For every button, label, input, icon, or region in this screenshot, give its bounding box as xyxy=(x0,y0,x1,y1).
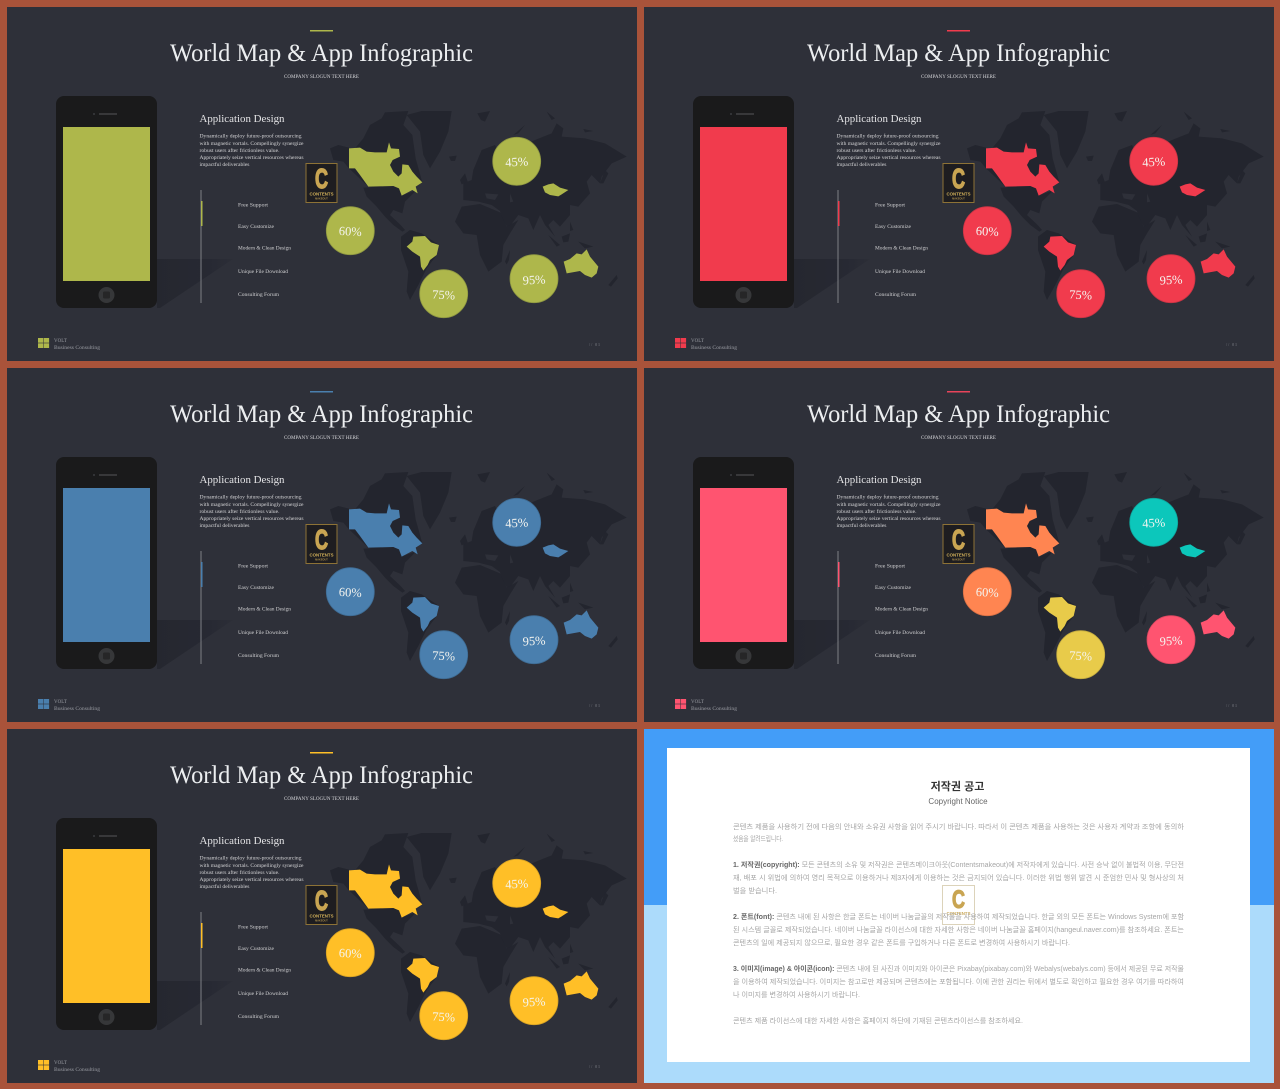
circle 75% xyxy=(1057,270,1105,318)
highlighted countries xyxy=(986,142,1235,278)
circle 45% xyxy=(1130,137,1178,185)
description: impactful deliverables xyxy=(200,522,250,529)
badge on notice: C xyxy=(952,886,965,914)
phone shadow xyxy=(157,981,233,1030)
circle 45% xyxy=(493,137,541,185)
phone xyxy=(693,96,794,308)
feature list: Unique File Download xyxy=(238,631,289,636)
world map xyxy=(330,833,627,1022)
badge: C xyxy=(952,524,965,555)
description: impactful deliverables xyxy=(836,161,886,168)
badge xyxy=(306,885,337,924)
circle 75% xyxy=(420,992,468,1040)
phone shadow xyxy=(157,620,233,669)
badge on notice: CONTENTS xyxy=(946,911,970,916)
notice subtitle: Copyright Notice xyxy=(928,797,988,806)
heading: Application Design xyxy=(200,113,285,125)
highlighted countries xyxy=(986,503,1235,639)
title: World Map & App Infographic xyxy=(807,401,1110,428)
badge on notice xyxy=(942,886,974,924)
circle 45% xyxy=(493,498,541,546)
circle 60% xyxy=(326,568,374,616)
description xyxy=(200,855,304,890)
badge: C xyxy=(952,163,965,194)
page number: // 01 xyxy=(589,342,600,347)
description: impactful deliverables xyxy=(836,522,886,529)
feature list: Easy Customize xyxy=(875,225,912,230)
feature list xyxy=(238,926,292,1020)
phone xyxy=(693,457,794,669)
footer text: Business Consulting xyxy=(54,1068,101,1073)
circle 60% xyxy=(963,568,1011,616)
feature list: Consulting Forum xyxy=(238,293,279,298)
footer text xyxy=(54,339,101,351)
slogan: COMPANY SLOGUN TEXT HERE xyxy=(284,797,359,802)
accent line xyxy=(947,30,970,32)
title: World Map & App Infographic xyxy=(170,762,473,789)
badge: CONTENTS xyxy=(310,914,334,918)
panel: multicolor variant xyxy=(644,368,1274,722)
feature list: Free Support xyxy=(238,564,269,570)
feature list: Free Support xyxy=(238,204,269,208)
slogan: COMPANY SLOGUN TEXT HERE xyxy=(921,75,996,80)
phone shadow xyxy=(794,259,870,308)
description: Appropriately seize vertical resources whereas xyxy=(200,877,304,883)
heading: Application Design xyxy=(836,474,922,486)
circle 75% xyxy=(1057,631,1105,679)
title: World Map & App Infographic xyxy=(170,40,473,67)
slogan: COMPANY SLOGUN TEXT HERE xyxy=(284,75,359,80)
footer text: Business Consulting xyxy=(691,707,738,712)
circle 95% xyxy=(510,255,558,303)
description: robust users after frictionless value. xyxy=(200,869,280,876)
feature list: Modern & Clean Design xyxy=(238,968,292,974)
circle 75% xyxy=(420,270,468,318)
highlighted countries xyxy=(349,864,598,1000)
footer logo xyxy=(38,699,49,709)
feature list: Easy Customize xyxy=(238,947,275,952)
circle 75%: 75% xyxy=(432,287,455,303)
description: with magnetic vortals. Compellingly synergize xyxy=(200,502,304,508)
progress line xyxy=(200,190,202,303)
section 3 image and icon: 을 이용하여 제작되었습니다. 이미지는 참고로만 제공되며 콘텐츠에는 포함됩니다. 이에 관한 권리는 뒤에서 별도로 확인하고 필요한 경우 여기를 따라하여 xyxy=(733,977,1184,986)
description: Appropriately seize vertical resources whereas xyxy=(836,516,940,522)
description: Appropriately seize vertical resources whereas xyxy=(200,155,304,161)
title: World Map & App Infographic xyxy=(170,401,473,428)
footer text xyxy=(54,1061,101,1073)
title: World Map & App Infographic xyxy=(807,40,1110,67)
description: Appropriately seize vertical resources whereas xyxy=(200,516,304,522)
description: robust users after frictionless value. xyxy=(836,147,916,154)
description: with magnetic vortals. Compellingly synergize xyxy=(200,141,304,147)
badge: CONTENTS xyxy=(310,192,334,196)
circle 60%: 60% xyxy=(338,224,362,239)
phone xyxy=(56,457,157,669)
description: Dynamically deploy future-proof outsourcing xyxy=(200,494,302,501)
footer text xyxy=(691,700,738,712)
accent line xyxy=(310,30,333,32)
footer logo xyxy=(675,338,686,348)
circle 45% xyxy=(1130,498,1178,546)
circle 75%: 75% xyxy=(432,648,455,664)
circle 60%: 60% xyxy=(338,585,362,600)
description: Dynamically deploy future-proof outsourcing xyxy=(200,855,302,862)
page number: // 01 xyxy=(1226,703,1237,708)
circle 45% xyxy=(493,859,541,907)
feature list: Easy Customize xyxy=(238,586,275,591)
badge: MAKEOUT xyxy=(315,558,328,562)
badge: CONTENTS xyxy=(310,552,334,558)
circle 95%: 95% xyxy=(522,272,546,288)
circle 45%: 45% xyxy=(1142,154,1166,170)
phone shadow xyxy=(794,620,870,669)
badge: MAKEOUT xyxy=(315,198,328,200)
progress line xyxy=(200,551,202,664)
slogan: COMPANY SLOGUN TEXT HERE xyxy=(284,436,359,441)
progress line xyxy=(838,190,840,303)
footer text: VOLT xyxy=(54,339,67,344)
circle 95%: 95% xyxy=(522,994,546,1010)
page number: // 01 xyxy=(589,703,600,708)
page number: // 01 xyxy=(589,1064,600,1069)
accent line xyxy=(310,391,333,392)
footer text: Business Consulting xyxy=(691,346,738,351)
panel: green variant xyxy=(7,7,637,361)
world map xyxy=(967,472,1264,661)
feature list: Unique File Download xyxy=(875,270,926,275)
circle 95%: 95% xyxy=(1159,633,1183,649)
heading: Application Design xyxy=(200,474,285,486)
slogan: COMPANY SLOGUN TEXT HERE xyxy=(921,436,996,441)
badge: MAKEOUT xyxy=(315,920,328,922)
circle 60%: 60% xyxy=(975,224,999,239)
badge xyxy=(306,163,337,202)
phone shadow xyxy=(157,259,233,308)
circle 60% xyxy=(326,207,374,255)
intro paragraph xyxy=(733,822,1185,843)
feature list: Modern & Clean Design xyxy=(238,246,292,252)
circle 75%: 75% xyxy=(1069,648,1092,664)
feature list: Unique File Download xyxy=(238,992,289,997)
description: impactful deliverables xyxy=(200,883,250,890)
accent line xyxy=(947,391,970,392)
feature list: Easy Customize xyxy=(875,586,912,591)
description xyxy=(836,494,941,529)
section 2 font: 2. 폰트(font): 콘텐츠 내에 된 사항은 한글 폰트는 네이버 나눔글꼴의 저작물을 사용하여 제작되었습니다. 한글 외의 모든 폰트는 Windows System에 포함 xyxy=(733,912,1185,921)
footer text xyxy=(54,700,101,712)
section 3 image and icon xyxy=(733,964,1185,999)
intro paragraph: 셨음을 알려드립니다. xyxy=(733,834,783,843)
circle 95%: 95% xyxy=(1159,272,1183,288)
footer text: VOLT xyxy=(691,700,704,705)
feature list: Consulting Forum xyxy=(875,654,916,659)
footer logo xyxy=(675,699,686,709)
closing note: 콘텐츠 제품 라이선스에 대한 자세한 사항은 홈페이지 하단에 기재된 콘텐츠라이선스를 참조하세요. xyxy=(733,1016,1023,1025)
footer text: VOLT xyxy=(691,339,704,344)
page number: // 01 xyxy=(1226,342,1237,347)
panel: copyright notice xyxy=(644,729,1274,1083)
phone xyxy=(56,96,157,308)
footer text: Business Consulting xyxy=(54,346,101,351)
section 3 image and icon: 나 이미지를 변경하여 사용하시기 바랍니다. xyxy=(733,990,860,999)
badge: C xyxy=(315,885,328,916)
highlighted countries xyxy=(349,142,598,278)
description: with magnetic vortals. Compellingly synergize xyxy=(200,863,304,869)
footer logo xyxy=(38,1060,49,1070)
circle 95% xyxy=(510,616,558,664)
badge xyxy=(943,163,974,202)
footer text: VOLT xyxy=(54,1061,67,1066)
circle 75% xyxy=(420,631,468,679)
badge: MAKEOUT xyxy=(952,198,965,200)
circle 60% xyxy=(326,929,374,977)
circle 95% xyxy=(510,977,558,1025)
highlighted countries xyxy=(349,503,598,639)
circle 75%: 75% xyxy=(432,1009,455,1025)
feature list: Consulting Forum xyxy=(238,1015,279,1020)
section 1 copyright: 벌을 받습니다. xyxy=(733,886,777,895)
section 1 copyright: 재, 배포 시 위법에 의하여 영리 목적으로 이용하거나 제3자에게 이용하는 것은 금지되어 있습니다. 이러한 위법 행위 발견 시 준엄한 민사 및 형사상의 처 xyxy=(733,873,1184,882)
feature list: Consulting Forum xyxy=(875,293,916,298)
section 3 image and icon: 3. 이미지(image) & 아이콘(icon): 콘텐츠 내에 된 사진과 이미지와 아이콘은 Pixabay(pixabay.com)와 Webalys(webalys.com) 등에서 제공된 무료 저작물 xyxy=(733,964,1185,973)
description: with magnetic vortals. Compellingly synergize xyxy=(836,141,941,147)
description: robust users after frictionless value. xyxy=(200,147,280,154)
feature list: Modern & Clean Design xyxy=(238,608,292,612)
panel: red variant xyxy=(644,7,1274,361)
notice title: 저작권 공고 xyxy=(931,779,984,793)
world map xyxy=(967,111,1264,300)
feature list: Free Support xyxy=(875,204,906,208)
feature list: Unique File Download xyxy=(875,631,926,636)
circle 45%: 45% xyxy=(1142,515,1166,531)
feature list: Modern & Clean Design xyxy=(875,246,929,252)
panel: blue variant xyxy=(7,368,637,722)
circle 60%: 60% xyxy=(338,946,362,961)
circle 45%: 45% xyxy=(505,154,529,170)
badge: MAKEOUT xyxy=(952,558,965,562)
circle 45%: 45% xyxy=(505,876,529,892)
badge xyxy=(306,524,337,564)
description: Dynamically deploy future-proof outsourcing xyxy=(836,133,939,140)
section 2 font: 된 시스템 글꼴로 제작되었습니다. 네이버 나눔글꼴 라이선스에 대한 자세한 사항은 네이버 나눔글꼴 홈페이지(hangeul.naver.com)를 참조하세요. 폰트는 xyxy=(733,925,1185,934)
footer text xyxy=(691,339,738,351)
description: robust users after frictionless value. xyxy=(836,508,916,515)
world map xyxy=(330,472,627,661)
circle 95% xyxy=(1147,255,1195,303)
description: with magnetic vortals. Compellingly synergize xyxy=(836,502,941,508)
description: Dynamically deploy future-proof outsourcing xyxy=(200,133,302,140)
feature list xyxy=(875,204,929,298)
accent line xyxy=(310,752,333,754)
description: Appropriately seize vertical resources whereas xyxy=(836,155,940,161)
feature list: Free Support xyxy=(875,564,906,570)
intro paragraph: 콘텐츠 제품을 사용하기 전에 다음의 안내와 소유권 사항을 읽어 주시기 바랍니다. 따라서 이 콘텐츠 제품을 사용하는 것은 사용자 계약과 조항에 동의하 xyxy=(733,822,1185,831)
circle 60% xyxy=(963,207,1011,255)
section 2 font xyxy=(733,912,1185,947)
heading: Application Design xyxy=(836,113,922,125)
progress line xyxy=(200,912,202,1025)
footer text: VOLT xyxy=(54,700,67,705)
section 1 copyright xyxy=(733,860,1184,895)
description xyxy=(200,133,304,168)
world map xyxy=(330,111,627,300)
badge: C xyxy=(315,163,328,194)
feature list: Easy Customize xyxy=(238,225,275,230)
heading: Application Design xyxy=(200,835,285,847)
circle 45%: 45% xyxy=(505,515,529,531)
panel: yellow variant xyxy=(7,729,637,1083)
feature list xyxy=(238,564,292,659)
circle 95%: 95% xyxy=(522,633,546,649)
section 1 copyright: 1. 저작권(copyright): 모든 콘텐츠의 소유 및 저작권은 콘텐츠메이크아웃(Contentsmakeout)에 저작자에게 있습니다. 사전 승낙 없이 불법적 이용, 무단전 xyxy=(733,860,1184,869)
footer text: Business Consulting xyxy=(54,707,101,712)
white card xyxy=(667,748,1250,1062)
description: robust users after frictionless value. xyxy=(200,508,280,515)
circle 60%: 60% xyxy=(975,585,999,600)
badge xyxy=(943,524,974,564)
description xyxy=(836,133,941,168)
feature list xyxy=(875,564,929,659)
section 2 font: 콘텐츠의 일에 제공되지 않으므로, 필요한 경우 같은 폰트를 구입하거나 다른 폰트로 변경하여 사용하시기 바랍니다. xyxy=(733,938,1070,947)
badge: C xyxy=(315,524,328,555)
feature list: Unique File Download xyxy=(238,270,289,275)
feature list: Free Support xyxy=(238,926,269,930)
progress line xyxy=(838,551,840,664)
feature list xyxy=(238,204,292,298)
description: Dynamically deploy future-proof outsourcing xyxy=(836,494,939,501)
feature list: Consulting Forum xyxy=(238,654,279,659)
footer logo xyxy=(38,338,49,348)
badge: CONTENTS xyxy=(946,192,970,196)
description xyxy=(200,494,304,529)
circle 95% xyxy=(1147,616,1195,664)
badge: CONTENTS xyxy=(946,552,970,558)
circle 75%: 75% xyxy=(1069,287,1092,303)
phone xyxy=(56,818,157,1030)
description: impactful deliverables xyxy=(200,161,250,168)
feature list: Modern & Clean Design xyxy=(875,608,929,612)
